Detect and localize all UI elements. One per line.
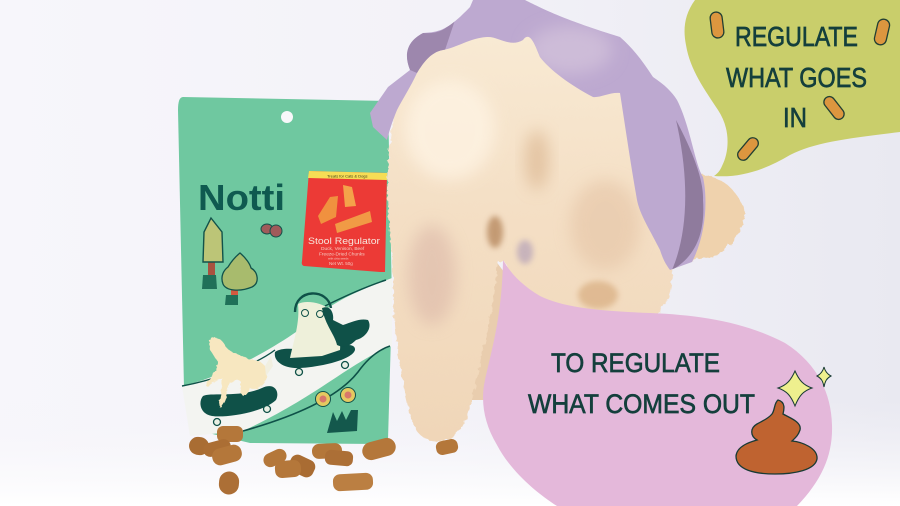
- product label: [302, 171, 387, 272]
- product label: Net Wt. 50g: [329, 261, 353, 266]
- far hind leg: [466, 240, 540, 400]
- hang hole: [281, 111, 293, 123]
- product label: Treats for Cats & Dogs: [327, 174, 368, 178]
- white road band: [182, 278, 392, 436]
- callout text: IN: [783, 102, 807, 133]
- icon: kibble bottom left: [735, 136, 761, 162]
- dog: [370, 0, 745, 441]
- icon: large sparkle: [778, 371, 812, 406]
- product label: with chia seeds: [328, 256, 349, 260]
- callout text: WHAT GOES: [726, 62, 867, 93]
- brand name: Notti: [198, 177, 285, 218]
- icon: small sparkle: [817, 367, 831, 387]
- tail: [690, 175, 745, 260]
- callout text: TO REGULATE: [551, 348, 720, 378]
- product label: Stool Regulator: [308, 236, 380, 247]
- pouch body: [178, 97, 392, 444]
- product label: Duck, Venison, Beef: [321, 246, 365, 252]
- product label: Freeze-Dried Chunks: [319, 252, 365, 258]
- kibble pile: [188, 426, 459, 495]
- skirt shading: [407, 20, 703, 270]
- icon: round tree: [222, 253, 257, 305]
- callout text: WHAT COMES OUT: [528, 389, 755, 419]
- icon: butterfly: [261, 224, 282, 237]
- icon: poop: [736, 400, 817, 474]
- illustration: dog on skateboard: [200, 338, 277, 426]
- dog body: [387, 17, 672, 441]
- illustration: flowers and grass: [316, 388, 358, 433]
- icon: kibble middle: [822, 94, 846, 122]
- icon: kibble top left: [709, 11, 725, 39]
- fur shading: [405, 80, 640, 325]
- icon: tall tree: [202, 218, 223, 289]
- icon: kibble top right: [873, 18, 891, 46]
- callout: to regulate what comes out: [483, 260, 832, 506]
- product pouch: [178, 97, 392, 444]
- illustration: cat on skateboard: [275, 293, 370, 376]
- callout: regulate what goes in: [685, 0, 900, 176]
- callout text: REGULATE: [735, 21, 858, 52]
- callout text: [528, 348, 755, 419]
- kibble images on label: [318, 185, 372, 233]
- callout text: [726, 21, 867, 133]
- ruffled skirt: [370, 0, 705, 270]
